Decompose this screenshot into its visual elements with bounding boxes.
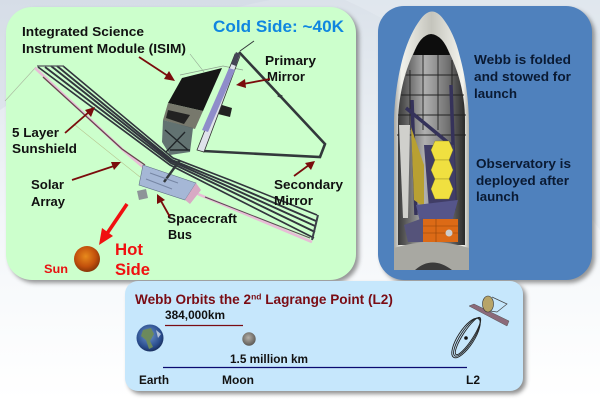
label: sunshield: [12, 125, 77, 156]
text: deployed: Observatory is: [476, 156, 571, 171]
orbit title: nd: [251, 292, 261, 302]
label: ISIM: [22, 24, 186, 56]
callout arrows: [65, 57, 315, 217]
instrument module: [162, 54, 243, 155]
label: sunshield: 5 Layer: [12, 125, 59, 140]
label: solar array: Array: [31, 194, 66, 209]
spacecraft bus: [137, 160, 201, 204]
telescope illustration: [5, 41, 325, 242]
label: spacecraft bus: [167, 211, 238, 242]
label: primary mirror: Mirror: [267, 69, 305, 84]
label: secondary mirror: [274, 177, 344, 208]
label: spacecraft bus: Bus: [168, 227, 192, 242]
rocket fairing cutaway: [394, 12, 469, 270]
panel: launch configuration: [378, 6, 595, 283]
earth-L2 distance: 1.5 million km: [230, 352, 308, 366]
earth-moon distance: 384,000km: [165, 308, 225, 322]
fairing interior: [398, 52, 465, 245]
earth-moon distance: [165, 308, 243, 326]
text: deployed: deployed after: [476, 173, 569, 188]
label: moon: Moon: [222, 373, 254, 387]
icon: moon: [242, 332, 256, 346]
text: folded: Webb is folded: [474, 52, 571, 67]
text: deployed: launch: [476, 189, 519, 204]
icon: L2 orbit with telescope: [447, 296, 509, 362]
heading: cold side: Cold Side: ~40K: [213, 17, 345, 36]
label: solar array: [31, 177, 66, 209]
text: folded: launch: [474, 86, 517, 101]
text: deployed: [476, 156, 571, 204]
stowed mirror segments: [431, 141, 453, 199]
fairing base: [394, 242, 469, 270]
label: hot side: [115, 240, 150, 279]
orbit title: Lagrange Point (L2): [261, 292, 393, 307]
text: folded: [474, 52, 571, 101]
orbit title: Webb Orbits the 2: [135, 292, 251, 307]
label: sun: Sun: [44, 262, 68, 276]
panel: observatory diagram: [5, 7, 359, 283]
panel: orbit: [125, 281, 526, 394]
label: ISIM: Instrument Module (ISIM): [22, 41, 186, 56]
label: hot side: Side: [115, 260, 150, 279]
mirror edge: [197, 52, 240, 152]
label: solar array: Solar: [31, 177, 64, 192]
stowed telescope structure: [399, 85, 458, 222]
sunshield: [5, 66, 318, 242]
icon: sun: [74, 246, 100, 272]
label: L2: L2: [466, 373, 480, 387]
primary mirror frame: [203, 41, 325, 157]
icon: earth: [136, 324, 164, 352]
label: sunshield: Sunshield: [12, 141, 77, 156]
label: spacecraft bus: Spacecraft: [167, 211, 238, 226]
text: folded: and stowed for: [474, 69, 571, 84]
labels and arrows: [12, 24, 344, 242]
label: ISIM: Integrated Science: [22, 24, 144, 39]
arrow: toward sun: [99, 204, 127, 245]
label: primary mirror: [265, 53, 317, 84]
label: hot side: Hot: [115, 240, 143, 259]
label: secondary mirror: Secondary: [274, 177, 344, 192]
orange spacecraft base: [404, 218, 458, 242]
label: secondary mirror: Mirror: [274, 193, 313, 208]
label: earth: Earth: [139, 373, 169, 387]
label: primary mirror: Primary: [265, 53, 317, 68]
